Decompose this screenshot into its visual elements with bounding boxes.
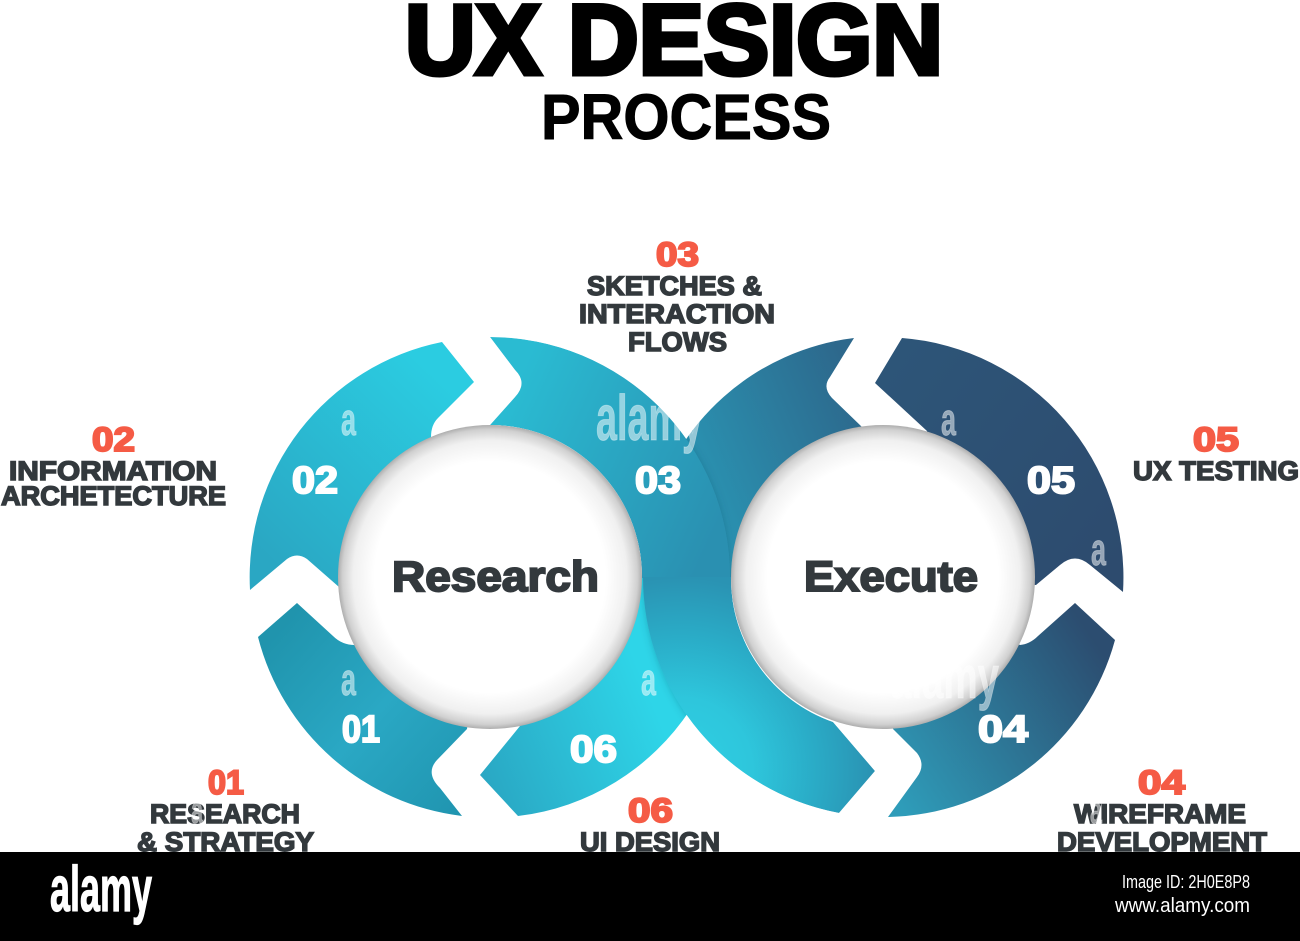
circle: Research	[338, 425, 642, 729]
label 01: research and strategy: a	[191, 790, 203, 832]
center label: Execute: Execute	[804, 553, 978, 601]
title	[405, 0, 943, 153]
label 02: information architecture	[1, 421, 226, 511]
segment numbers: 06	[570, 729, 617, 771]
label 03: sketches and interaction flows	[579, 236, 775, 357]
label 05: UX testing: 05	[1193, 421, 1239, 459]
footer url: www.alamy.com	[1114, 895, 1250, 917]
label 01: research and strategy: RESEARCH	[150, 799, 300, 829]
label 05: UX testing: UX TESTING	[1133, 456, 1299, 486]
label 01: research and strategy: & STRATEGY	[137, 827, 314, 857]
center label: Research: Research	[392, 553, 599, 601]
segment numbers: 03	[635, 460, 681, 502]
watermarks on segments	[341, 382, 1107, 705]
label 04: wireframe development: WIREFRAME	[1074, 799, 1246, 829]
segment numbers	[292, 460, 1075, 771]
label 01: research and strategy: 01	[208, 764, 244, 802]
footer bar	[0, 852, 1300, 941]
segment 05	[875, 338, 1123, 592]
watermarks on segments: alamy	[596, 382, 703, 454]
watermarks on segments: a	[341, 654, 357, 705]
heading: PROCESS: PROCESS	[541, 81, 831, 153]
segment numbers: 02	[292, 460, 338, 502]
watermarks on segments: a	[341, 394, 357, 445]
segment numbers: 04	[978, 709, 1028, 751]
segment 04	[883, 577, 1115, 817]
label 03: sketches and interaction flows: SKETCHES &	[587, 271, 762, 301]
label 06: UI design	[580, 792, 720, 857]
segment 02	[250, 342, 490, 590]
label 02: information architecture: ARCHETECTURE	[1, 481, 226, 511]
label 02: information architecture: INFORMATION	[9, 456, 217, 486]
label 02: information architecture: 02	[92, 421, 135, 459]
footer logo: alamy	[50, 853, 152, 925]
watermarks on segments: a	[641, 654, 657, 705]
segment 03 crossing band	[490, 337, 875, 813]
watermarks on segments: a	[941, 394, 957, 445]
label 06: UI design: UI DESIGN	[580, 827, 720, 857]
circle: Execute	[731, 425, 1035, 729]
diagram: infinity loop	[250, 337, 1123, 817]
footer image id: Image ID: 2H0E8P8	[1122, 872, 1250, 892]
label 05: UX testing	[1133, 421, 1299, 486]
watermark over Execute circle: alamy	[890, 644, 999, 711]
label 04: wireframe development	[1057, 764, 1268, 857]
label 03: sketches and interaction flows: INTERACTION	[579, 299, 775, 329]
label 03: sketches and interaction flows: 03	[656, 236, 699, 274]
label 04: wireframe development: a	[1090, 790, 1102, 832]
segment numbers: 05	[1027, 460, 1075, 502]
watermarks on segments: a	[1091, 524, 1107, 575]
label 04: wireframe development: 04	[1138, 764, 1185, 802]
segment numbers: 01	[342, 709, 380, 751]
label 03: sketches and interaction flows: FLOWS	[628, 327, 727, 357]
segment 03 right part	[650, 338, 883, 577]
segment 06	[480, 577, 690, 816]
label 01: research and strategy	[137, 764, 314, 857]
label 06: UI design: 06	[628, 792, 673, 830]
label 04: wireframe development: DEVELOPMENT	[1057, 827, 1268, 857]
segment 01	[258, 577, 490, 816]
